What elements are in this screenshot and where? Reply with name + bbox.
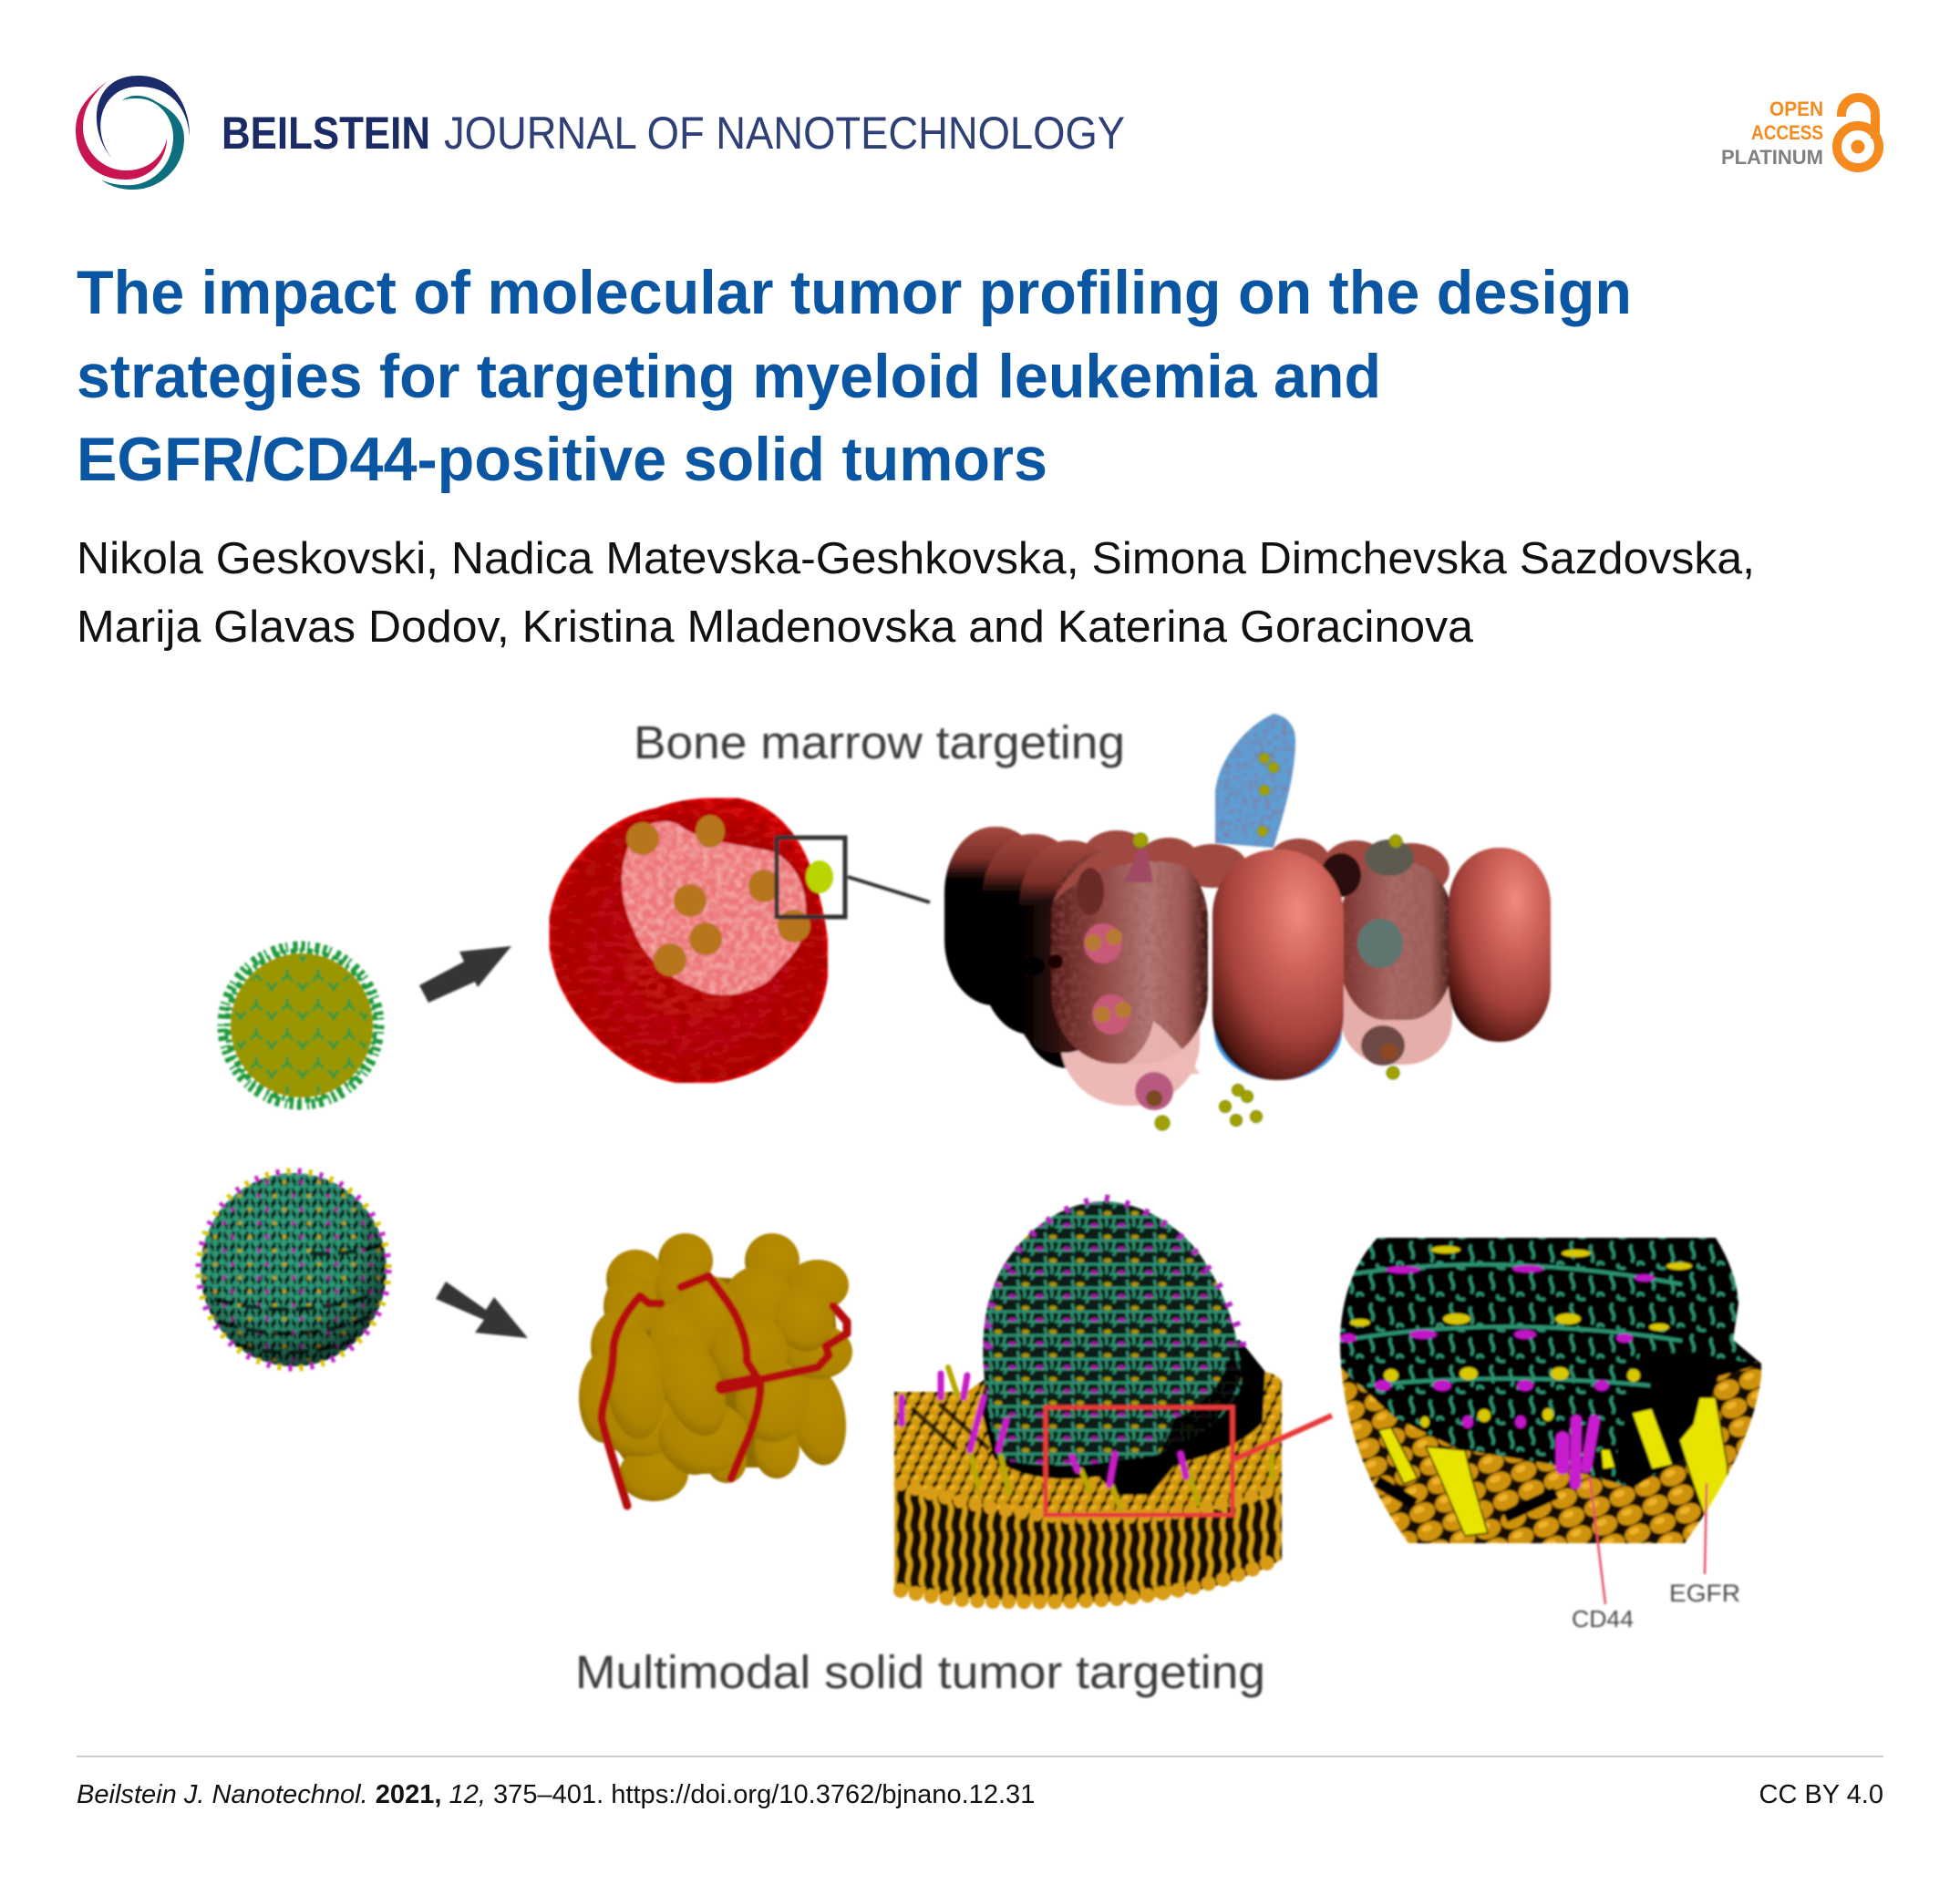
- title: [77, 258, 1632, 494]
- membrane top surface: [894, 1370, 1282, 1520]
- yellow linkers: [1350, 1246, 1692, 1427]
- lipid head rows: [901, 1484, 1280, 1518]
- dome nanoparticle: [983, 1201, 1242, 1466]
- red zoom box: [1046, 1407, 1233, 1515]
- dark shoulder of left cell: [1019, 898, 1101, 1053]
- solid tumor: [579, 1233, 853, 1506]
- dark gaps in lipid surface: [912, 1404, 989, 1449]
- footer rule: [77, 1756, 1883, 1757]
- arrow: top: [419, 946, 511, 1003]
- arrow: bottom: [436, 1282, 528, 1338]
- badge text: [1721, 98, 1823, 169]
- title: The impact of molecular tumor profiling on the design: [77, 258, 1632, 327]
- citation: Beilstein J. Nanotechnol. 2021, 12, 375–401. https://doi.org/10.3762/bjnano.12.31: [77, 1780, 1035, 1809]
- callout lines: [1590, 1477, 1707, 1604]
- CD44 receptors: [1563, 1420, 1594, 1484]
- solid right cell: [1449, 848, 1551, 1042]
- vesicles inside left cell: [1023, 850, 1173, 1110]
- translucent left cell: [1051, 848, 1208, 1064]
- cell membrane with docked nanoparticle: [894, 1198, 1332, 1602]
- connector line: [848, 877, 930, 902]
- docking nanoparticle: [806, 860, 833, 893]
- EGFR receptors: [1378, 1397, 1728, 1536]
- badge text: OPEN: [1769, 98, 1823, 120]
- icon: swirl logo: [76, 76, 190, 190]
- magenta linkers: [1340, 1265, 1655, 1428]
- left cell cap: [1053, 843, 1208, 902]
- translucent right cell: [1321, 839, 1453, 1066]
- lipid tails: [894, 1483, 1282, 1602]
- dark shading on dome: [1158, 1349, 1242, 1458]
- authors: Nikola Geskovski, Nadica Matevska-Geshkovska, Simona Dimchevska Sazdovska,: [77, 534, 1755, 583]
- blood vessels: [602, 1276, 847, 1506]
- badge text: PLATINUM: [1721, 146, 1823, 169]
- journal name: BEILSTEIN: [222, 108, 430, 159]
- pale notch at cell base: [1117, 1021, 1200, 1076]
- receptors on membrane: [902, 1367, 1272, 1509]
- open access platinum badge: [1721, 98, 1879, 169]
- zoom box: [777, 838, 845, 917]
- internalised nanoparticles: [626, 815, 810, 976]
- journal name light part: JOURNAL OF NANOTECHNOLOGY: [444, 108, 1125, 159]
- badge text: ACCESS: [1751, 121, 1823, 144]
- red target cell: [550, 798, 930, 1083]
- black gaps: [1377, 1481, 1556, 1517]
- label: CD44: CD44: [1572, 1605, 1634, 1632]
- authors: [77, 534, 1755, 652]
- title: EGFR/CD44-positive solid tumors: [77, 425, 1047, 494]
- solid centre cell: [1212, 850, 1344, 1080]
- icon: open padlock: [1837, 98, 1879, 168]
- cell body: [550, 798, 828, 1083]
- heading: multimodal solid tumor targeting: Multimodal solid tumor targeting: [575, 1646, 1265, 1698]
- membrane surface: [1336, 1349, 1764, 1545]
- blue vessel: [1215, 714, 1295, 848]
- black edge: [1614, 1349, 1764, 1486]
- green antibody nanoparticle: [222, 946, 379, 1105]
- back cell tops: [1082, 830, 1449, 898]
- dual targeted nanoparticle: [199, 1171, 388, 1368]
- license: CC BY 4.0: [1759, 1780, 1883, 1809]
- bone marrow sinusoid with cells: [944, 714, 1551, 1130]
- lattice strands: [1340, 1264, 1682, 1385]
- graphical abstract figure: [199, 714, 1764, 1698]
- authors: Marija Glavas Dodov, Kristina Mladenovska and Katerina Goracinova: [77, 602, 1474, 652]
- green nanoparticles: [1133, 753, 1402, 1130]
- title: strategies for targeting myeloid leukemia and: [77, 342, 1381, 411]
- blue vessel lower end: [1214, 984, 1342, 1080]
- nanoparticle mass: [1336, 1231, 1764, 1488]
- magnified inset: receptor binding: [1336, 1231, 1764, 1545]
- tumor cells: [579, 1233, 853, 1501]
- dome fringe: [988, 1198, 1245, 1358]
- journal logo and name: [76, 76, 430, 190]
- tumor backing mass: [597, 1276, 839, 1486]
- pale interior: [622, 821, 806, 995]
- red connector: [1233, 1416, 1332, 1460]
- heading: bone marrow targeting: Bone marrow targeting: [634, 716, 1125, 768]
- shadow under particle: [980, 1340, 1265, 1495]
- pale left cell: [1060, 966, 1200, 1106]
- dark left cells: [944, 827, 1121, 1068]
- label: EGFR: EGFR: [1669, 1580, 1740, 1607]
